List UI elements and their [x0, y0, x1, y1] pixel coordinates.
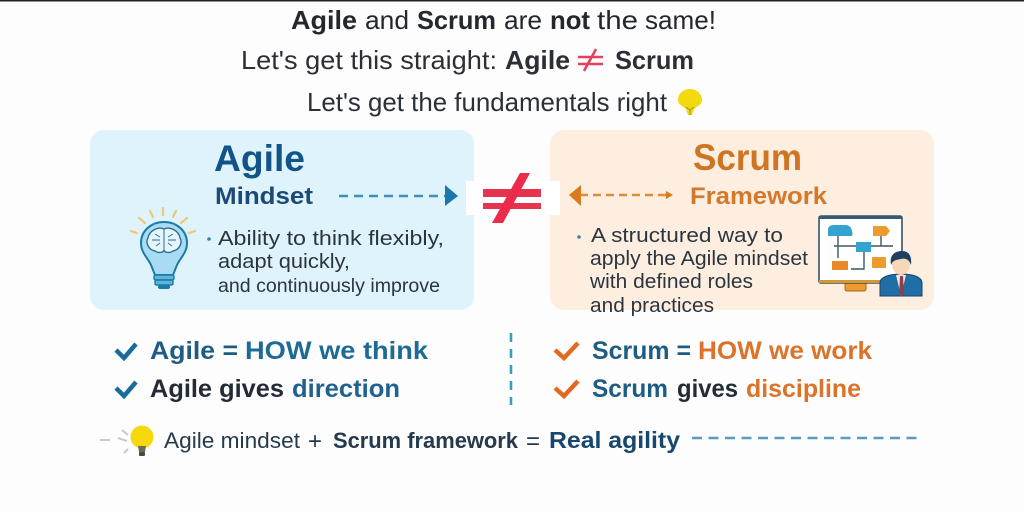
heading: title line: Scrum: [417, 5, 496, 35]
heading: title line: are: [504, 5, 542, 35]
footer dashed line: [692, 437, 918, 439]
Agile description: and continuously improve: [218, 275, 440, 297]
person: [880, 251, 922, 296]
Agile heading: Agile: [214, 138, 305, 179]
panel: Scrum: [550, 130, 934, 317]
footer icon: bulb with rays: [100, 426, 154, 456]
heading: title line: same!: [645, 5, 716, 35]
check icon: [555, 343, 578, 358]
Scrum gives discipline: Scrum: [592, 375, 668, 403]
Agile description: Ability to think flexibly,: [218, 227, 444, 250]
Agile = HOW we think: [150, 337, 428, 365]
heading: title line: not: [550, 5, 590, 35]
heading: title line: the: [597, 5, 638, 35]
footer text: [164, 427, 680, 455]
check icon: [116, 344, 136, 358]
heading: Agile not equal Scrum: Agile: [505, 45, 570, 75]
footer text: Agile mindset: [164, 428, 300, 453]
Agile gives direction: direction: [292, 375, 400, 403]
Scrum gives discipline: discipline: [746, 375, 861, 403]
not-equal badge: [466, 173, 560, 223]
Scrum = HOW we work: HOW we work: [698, 337, 872, 365]
heading: Agile not equal Scrum: [241, 45, 694, 75]
icon: monitor with flowchart and person: [819, 216, 922, 296]
arrow: Framework to not-equal: [569, 185, 673, 206]
footer text: Real agility: [549, 427, 680, 453]
Scrum description: and practices: [590, 294, 714, 317]
Scrum description: with defined roles: [589, 270, 753, 293]
Agile = HOW we think: Agile =: [150, 337, 238, 365]
Mindset subheading: Mindset: [215, 183, 313, 210]
arrow: Agile to not-equal: [339, 185, 458, 206]
Agile description: [207, 227, 444, 297]
footer formula: [100, 426, 918, 456]
heading: title line: Agile: [291, 5, 357, 35]
footer text: =: [526, 428, 540, 455]
check icon: [555, 381, 578, 396]
Scrum gives discipline: gives: [677, 375, 738, 403]
footer text: Scrum framework: [333, 428, 519, 453]
icon: yellow bulb: [678, 89, 702, 115]
Scrum = HOW we work: Scrum =: [592, 337, 691, 365]
footer text: +: [308, 428, 322, 455]
heading: Agile not equal Scrum: Let's get this straight:: [241, 45, 497, 75]
heading: title line: and: [365, 5, 409, 35]
Scrum gives discipline: [592, 375, 861, 403]
Agile = HOW we think: HOW we think: [245, 337, 428, 365]
center divider: [510, 333, 512, 405]
Agile description: adapt quickly,: [218, 250, 350, 273]
heading: Agile not equal Scrum: Scrum: [615, 45, 694, 75]
Scrum description: [577, 224, 808, 317]
Scrum description: apply the Agile mindset: [590, 247, 808, 270]
Agile gives direction: [150, 375, 400, 403]
check icon: [116, 382, 136, 396]
Scrum description: A structured way to: [591, 224, 783, 247]
heading: title line: [291, 5, 716, 35]
panel: Agile: [90, 130, 474, 310]
icon: brain light bulb: [131, 208, 195, 289]
Scrum heading: Scrum: [693, 137, 802, 178]
left takeaways: [116, 337, 428, 403]
right takeaways: [555, 337, 872, 403]
Agile gives direction: Agile gives: [150, 375, 284, 403]
Scrum = HOW we work: [592, 337, 872, 365]
subheading: Let's get the fundamentals right: [307, 87, 668, 117]
Framework subheading: Framework: [690, 183, 828, 210]
